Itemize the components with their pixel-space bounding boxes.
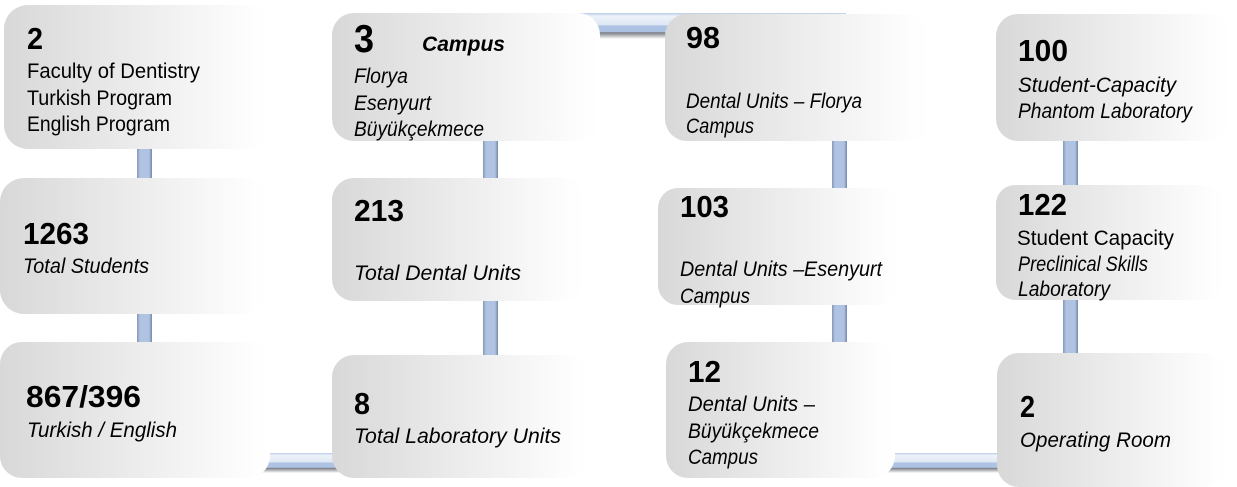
- number: 1263: 1263: [23, 216, 89, 251]
- panel: Turkish / English split: [0, 342, 270, 478]
- panel: campuses: [332, 13, 600, 141]
- panel: total dental units: [332, 178, 585, 301]
- text: Total Laboratory Units: Total Laboratory Units: [354, 425, 562, 448]
- connector: bottom link column 1 to 2: [260, 453, 340, 473]
- text: Preclinical Skills: Preclinical Skills: [1018, 253, 1148, 276]
- text: Campus: Campus: [422, 33, 505, 56]
- panel: operating rooms: [997, 353, 1228, 487]
- text: Student-Capacity: Student-Capacity: [1018, 74, 1177, 97]
- number: 2: 2: [27, 21, 43, 56]
- text: Campus: Campus: [688, 446, 758, 469]
- text: Dental Units –: Dental Units –: [688, 393, 815, 416]
- text: Büyükçekmece: Büyükçekmece: [688, 420, 819, 443]
- connector: bottom link column 3 to 4: [885, 453, 1005, 473]
- text: Dental Units – Florya: Dental Units – Florya: [686, 90, 862, 113]
- connector: column 4 vertical links: [1063, 141, 1078, 354]
- panel: Esenyurt dental units: [658, 188, 900, 308]
- text: Laboratory: Laboratory: [1018, 278, 1111, 301]
- text: Turkish Program: Turkish Program: [27, 87, 172, 110]
- text: Total Dental Units: Total Dental Units: [354, 262, 521, 285]
- number: 213: 213: [354, 193, 404, 228]
- number: 8: 8: [354, 386, 370, 421]
- text: English Program: English Program: [27, 113, 170, 136]
- text: Dental Units –Esenyurt: Dental Units –Esenyurt: [680, 258, 883, 281]
- panel: Büyükçekmece dental units: [666, 342, 895, 478]
- number: 12: 12: [688, 354, 721, 389]
- text: Büyükçekmece: Büyükçekmece: [354, 118, 484, 141]
- text: Student Capacity: Student Capacity: [1017, 227, 1174, 250]
- number: 100: 100: [1018, 33, 1068, 68]
- text: Florya: Florya: [354, 65, 408, 88]
- connector: column 2 vertical links: [483, 141, 498, 356]
- text: Campus: Campus: [680, 285, 750, 308]
- panel: Florya dental units: [665, 14, 930, 141]
- panel: preclinical skills laboratory capacity: [996, 185, 1225, 301]
- text: Operating Room: Operating Room: [1020, 429, 1171, 452]
- panel: phantom laboratory capacity: [996, 14, 1230, 141]
- text: Faculty of Dentistry: Faculty of Dentistry: [27, 60, 200, 83]
- text: Phantom Laboratory: Phantom Laboratory: [1018, 100, 1193, 123]
- panel: total laboratory units: [332, 355, 590, 478]
- text: Campus: Campus: [686, 115, 754, 138]
- connector: column 3 vertical links: [832, 141, 847, 343]
- connector: column 1 vertical links: [137, 149, 152, 343]
- panel: faculty count: [4, 5, 270, 149]
- number: 122: 122: [1018, 187, 1067, 222]
- text: Total Students: Total Students: [23, 255, 149, 278]
- number: 3: 3: [354, 18, 374, 61]
- panel: total students: [0, 178, 268, 314]
- text: Turkish / English: Turkish / English: [27, 419, 177, 442]
- number: 98: 98: [686, 20, 720, 55]
- number: 867/396: 867/396: [26, 379, 141, 414]
- number: 103: 103: [680, 189, 729, 224]
- text: Esenyurt: Esenyurt: [354, 92, 432, 115]
- connector: top link column 2 to 3: [488, 13, 846, 39]
- number: 2: 2: [1020, 389, 1035, 424]
